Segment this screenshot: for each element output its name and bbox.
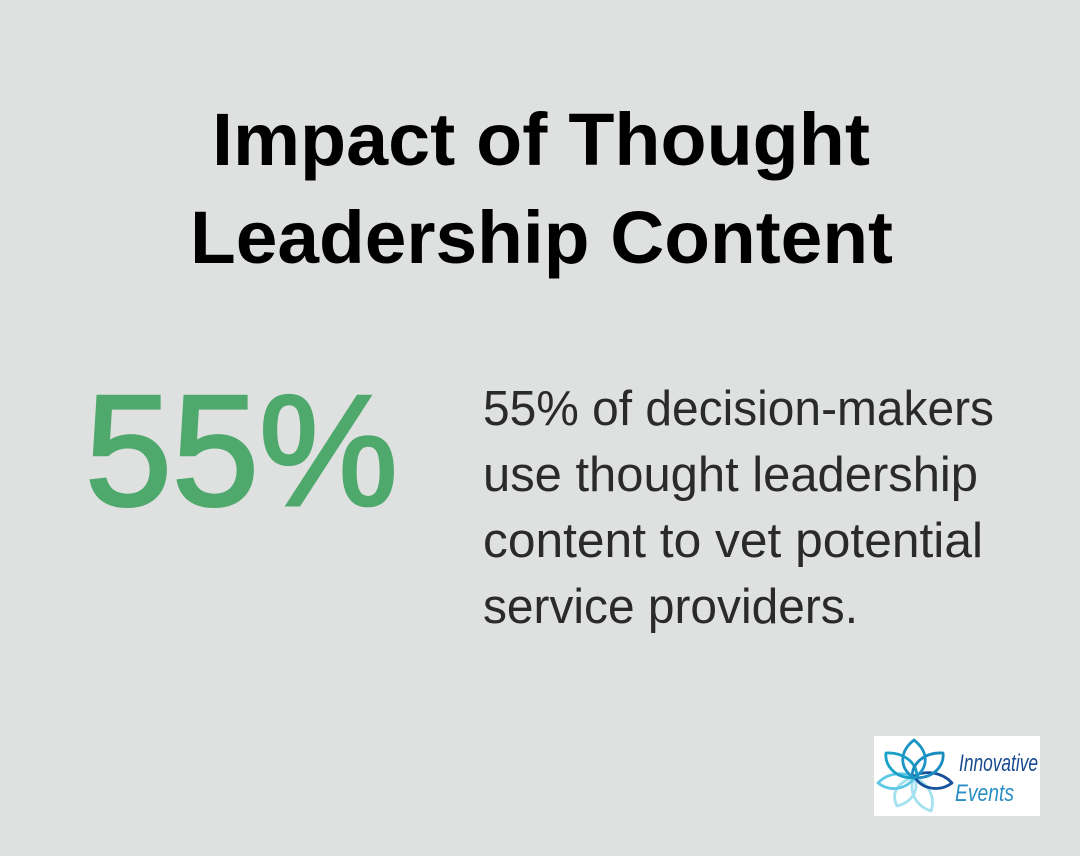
description text: content to vet potential <box>483 514 983 568</box>
title: Leadership Content <box>190 196 893 279</box>
logo wordmark: Events <box>955 780 1014 807</box>
description text: 55% of decision-makers <box>483 382 994 436</box>
big statistic: 55%: 55% <box>85 363 398 539</box>
logo wordmark <box>955 750 1038 807</box>
description text: use thought leadership <box>483 448 978 502</box>
logo: Innovative Events <box>874 736 1040 816</box>
description text <box>483 382 994 634</box>
icon: lotus flower <box>878 740 952 811</box>
description text: service providers. <box>483 580 858 634</box>
title <box>190 98 893 279</box>
logo wordmark: Innovative <box>959 750 1038 777</box>
title: Impact of Thought <box>212 98 870 181</box>
